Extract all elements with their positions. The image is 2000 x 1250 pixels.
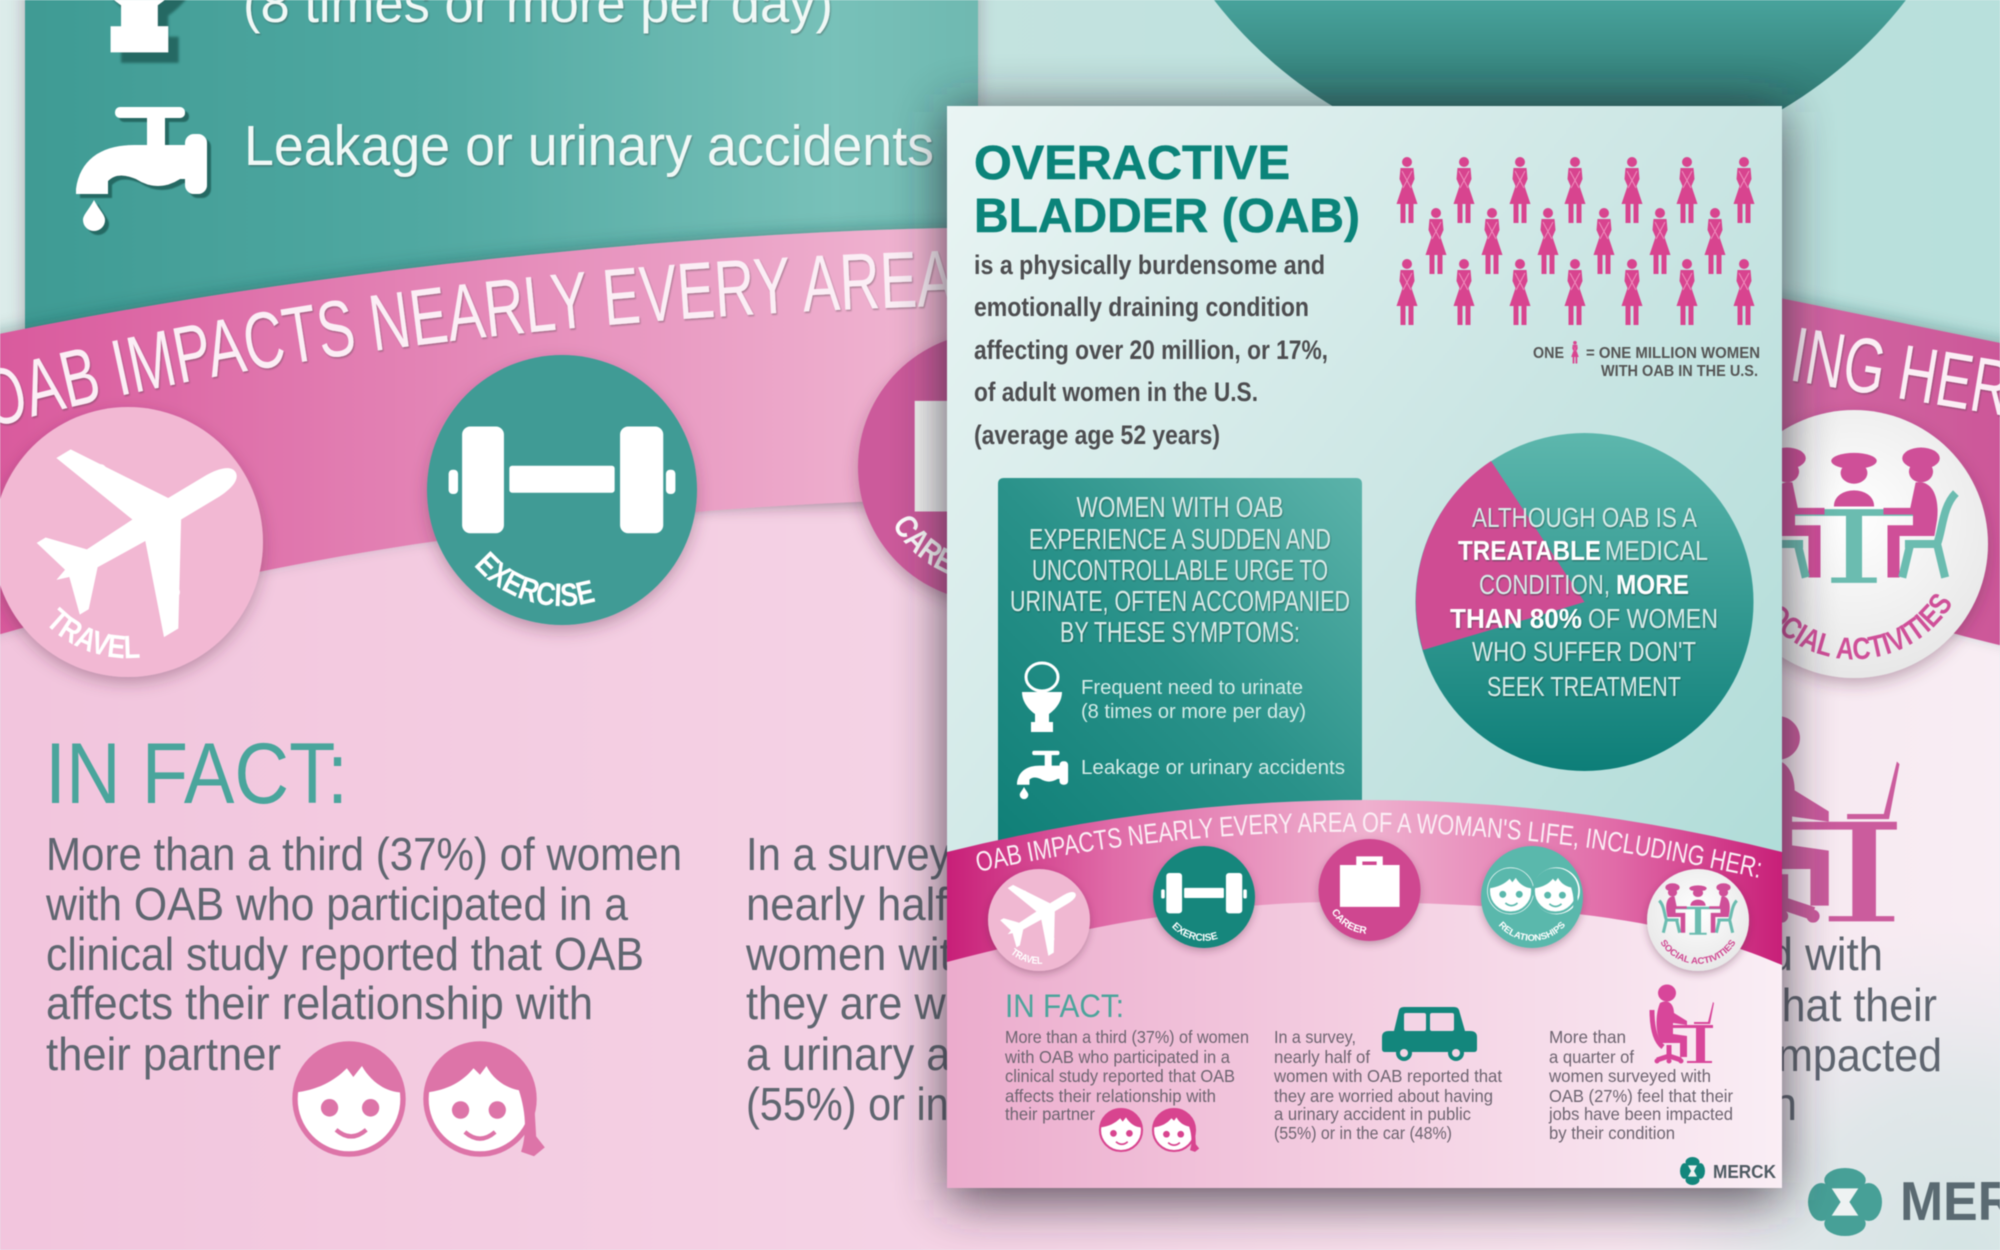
label: CAREER <box>1332 908 1368 934</box>
legend: ONE <box>1533 345 1564 362</box>
pie text: SEEK TREATMENT <box>1487 671 1681 702</box>
logo: merck <box>1680 1157 1776 1185</box>
title: BLADDER (OAB) <box>974 190 1360 243</box>
text block: job statistic: by their condition <box>1549 1123 1675 1143</box>
heading: enlarged in fact: IN FACT: <box>45 726 348 822</box>
symptoms heading: UNCONTROLLABLE URGE TO <box>1032 555 1328 587</box>
text block: enlarged survey statistic: (55%) or in the car (48%) <box>746 1078 1209 1130</box>
badge: exercise small <box>1150 845 1259 956</box>
badge: career small <box>1314 838 1424 948</box>
text block: intro: is a physically burdensome and <box>974 250 1325 280</box>
symptoms heading: WOMEN WITH OAB <box>1076 492 1284 524</box>
symptom: frequency: (8 times or more per day) <box>1081 701 1306 723</box>
title <box>974 137 1360 243</box>
text block: intro: affecting over 20 million, or 17%, <box>974 335 1328 365</box>
pie text: CONDITION, <box>1479 569 1610 600</box>
band heading left: OAB IMPACTS NEARLY EVERY AREA <box>0 250 948 426</box>
text block: enlarged survey statistic: In a survey, <box>746 828 959 880</box>
text block: enlarged job statistic <box>1459 928 1942 1130</box>
label: SOCIAL ACTIVITIES <box>1660 939 1736 965</box>
symptoms heading: BY THESE SYMPTOMS: <box>1060 617 1300 649</box>
symptom: frequency <box>1081 677 1306 723</box>
band heading: OAB IMPACTS NEARLY EVERY AREA OF A WOMAN'S LIFE, INCLUDING HER: <box>976 812 1762 878</box>
pie text: OF WOMEN <box>1588 603 1718 634</box>
text block: intro: (average age 52 years) <box>974 420 1220 450</box>
pie chart: treatment <box>1416 433 1754 771</box>
panel: front poster <box>946 105 1783 1189</box>
label: exercise: EXERCISE <box>474 550 596 607</box>
text block: intro: of adult women in the U.S. <box>974 377 1258 407</box>
text block: survey statistic: they are worried about having <box>1274 1086 1493 1106</box>
text block: intro: emotionally draining condition <box>974 292 1309 322</box>
text block: enlarged job statistic: OAB (27%) feel that their <box>1459 979 1937 1031</box>
icon: toilet <box>87 0 192 52</box>
poster drop shadow <box>947 112 1782 1200</box>
icon: faucet <box>76 107 207 231</box>
text block: partner statistic: with OAB who participated in a <box>1004 1047 1230 1067</box>
text block: enlarged survey statistic: they are worried about having <box>746 977 1316 1029</box>
logo: enlarged merck <box>1808 1168 2000 1236</box>
icon badge: career <box>850 340 948 607</box>
badge: relationships small <box>1477 845 1586 956</box>
text block: enlarged job statistic: jobs have been impacted <box>1462 1029 1942 1081</box>
pie text: MEDICAL <box>1605 535 1708 566</box>
legend: = ONE MILLION WOMEN <box>1586 345 1760 362</box>
icon badge: exercise <box>420 354 705 640</box>
label: travel: TRAVEL <box>49 606 140 659</box>
text block: job statistic: women surveyed with <box>1548 1066 1711 1086</box>
band: enlarged pink arch <box>0 220 2000 650</box>
symptoms heading <box>1010 492 1350 649</box>
icon: car <box>1382 1007 1477 1061</box>
text block: survey statistic <box>1273 1027 1502 1143</box>
text block: enlarged survey statistic: a urinary accident in public <box>746 1028 1258 1080</box>
label: career: CAREER <box>894 516 948 574</box>
label: social activities: SOCIAL ACTIVITIES <box>1781 593 1952 660</box>
icon: faucet small <box>1017 751 1068 799</box>
badge: travel small <box>985 868 1094 978</box>
pie text: MORE <box>1616 569 1689 600</box>
lower pink section <box>947 900 1782 1188</box>
label: RELATIONSHIPS <box>1498 920 1566 942</box>
pie text <box>1450 502 1718 702</box>
text block: partner statistic: their partner <box>1005 1104 1095 1124</box>
label: EXERCISE <box>1172 922 1218 942</box>
icon badge: social activities <box>1781 410 1994 694</box>
legend <box>1533 341 1760 380</box>
badge: social small <box>1642 868 1752 979</box>
symptom text: leakage: Leakage or urinary accidents <box>244 114 934 178</box>
panel: enlarged teal symptoms panel <box>25 0 978 500</box>
title: OVERACTIVE <box>974 137 1290 190</box>
text block: enlarged partner statistic: their partner <box>46 1028 281 1080</box>
text block: survey statistic: (55%) or in the car (48%) <box>1274 1123 1452 1143</box>
text block: job statistic: jobs have been impacted <box>1548 1104 1733 1124</box>
band: front arch <box>946 799 1783 966</box>
text block: partner statistic: affects their relationship with <box>1005 1086 1216 1106</box>
text block: enlarged partner statistic: affects their relationship with <box>46 977 593 1029</box>
text block: enlarged job statistic: women surveyed with <box>1461 928 1883 980</box>
symptoms heading: URINATE, OFTEN ACCOMPANIED <box>1010 586 1350 618</box>
icon badge: travel <box>0 406 270 692</box>
heading: in fact: IN FACT: <box>1005 988 1124 1024</box>
icon: partner faces <box>1100 1108 1199 1152</box>
text block: job statistic: OAB (27%) feel that their <box>1549 1086 1733 1106</box>
text block: enlarged survey statistic: women with OAB reported that <box>745 928 1339 980</box>
text block: survey statistic: In a survey, <box>1274 1027 1356 1047</box>
pie text: TREATABLE <box>1458 535 1601 566</box>
symptoms heading: EXPERIENCE A SUDDEN AND <box>1029 524 1331 556</box>
text block: enlarged partner statistic: More than a third (37%) of women <box>46 828 682 880</box>
icon: enlarged partner faces <box>295 1042 545 1156</box>
text block: enlarged survey statistic: nearly half of <box>746 878 996 930</box>
symptom: leakage: Leakage or urinary accidents <box>1081 757 1345 779</box>
pie text: WHO SUFFER DON'T <box>1472 636 1696 667</box>
text block: job statistic: More than <box>1549 1027 1626 1047</box>
symptom: frequency: Frequent need to urinate <box>1081 677 1303 699</box>
icon: desk worker <box>1652 984 1714 1064</box>
text block: survey statistic: women with OAB reported that <box>1273 1066 1502 1086</box>
label: TRAVEL <box>1012 948 1043 964</box>
text block: partner statistic: clinical study reported that OAB <box>1005 1066 1235 1086</box>
pie text: ALTHOUGH OAB IS A <box>1472 502 1697 533</box>
text block: enlarged survey statistic <box>745 828 1339 1130</box>
logo: merck: MERCK <box>1713 1162 1776 1182</box>
text block: partner statistic <box>1004 1027 1249 1124</box>
text block: survey statistic: a urinary accident in public <box>1274 1104 1471 1124</box>
panel: symptoms box <box>998 478 1362 850</box>
text block: partner statistic: More than a third (37%) of women <box>1005 1027 1249 1047</box>
pictogram: women with OAB <box>1396 157 1754 325</box>
legend: WITH OAB IN THE U.S. <box>1601 363 1758 380</box>
text block: job statistic <box>1548 1027 1733 1143</box>
icon: enlarged desk worker <box>1737 716 1900 923</box>
icon: toilet small <box>1022 663 1062 732</box>
big teal pie behind the poster <box>1123 0 1997 170</box>
text block: intro <box>974 250 1328 450</box>
text block: enlarged partner statistic: with OAB who participated in a <box>45 878 628 930</box>
text block: enlarged job statistic: by their condition <box>1462 1078 1797 1130</box>
text block: job statistic: a quarter of <box>1549 1047 1634 1067</box>
text block: enlarged partner statistic <box>45 828 682 1080</box>
text block: survey statistic: nearly half of <box>1274 1047 1370 1067</box>
pie text: THAN 80% <box>1450 603 1582 634</box>
text block: enlarged partner statistic: clinical study reported that OAB <box>46 928 644 980</box>
